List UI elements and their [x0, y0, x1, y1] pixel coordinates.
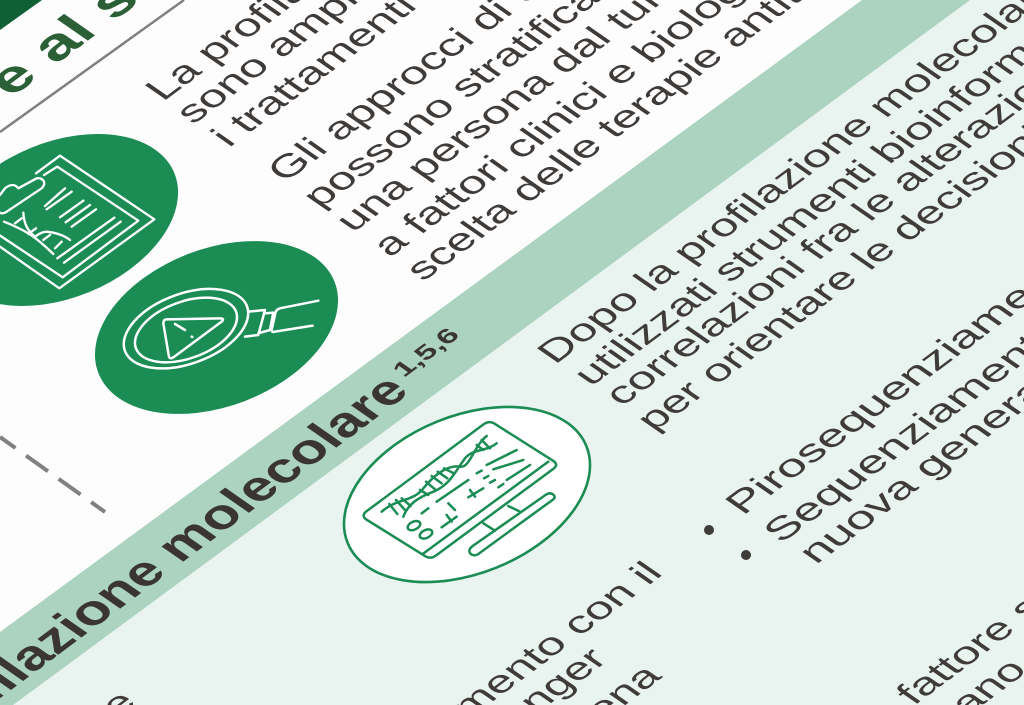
top-left dark green header block — [0, 0, 42, 30]
icon: clipboard with DNA on green ellipse — [0, 101, 204, 339]
icon: magnifier with warning triangle on green ellipse — [70, 209, 363, 446]
banner superscript references: 1,5,6 — [386, 323, 465, 381]
icon: sequencing screen with DNA in white outlined ellipse — [318, 373, 616, 616]
dashed separator — [0, 437, 105, 512]
heading underline rule — [0, 0, 184, 132]
